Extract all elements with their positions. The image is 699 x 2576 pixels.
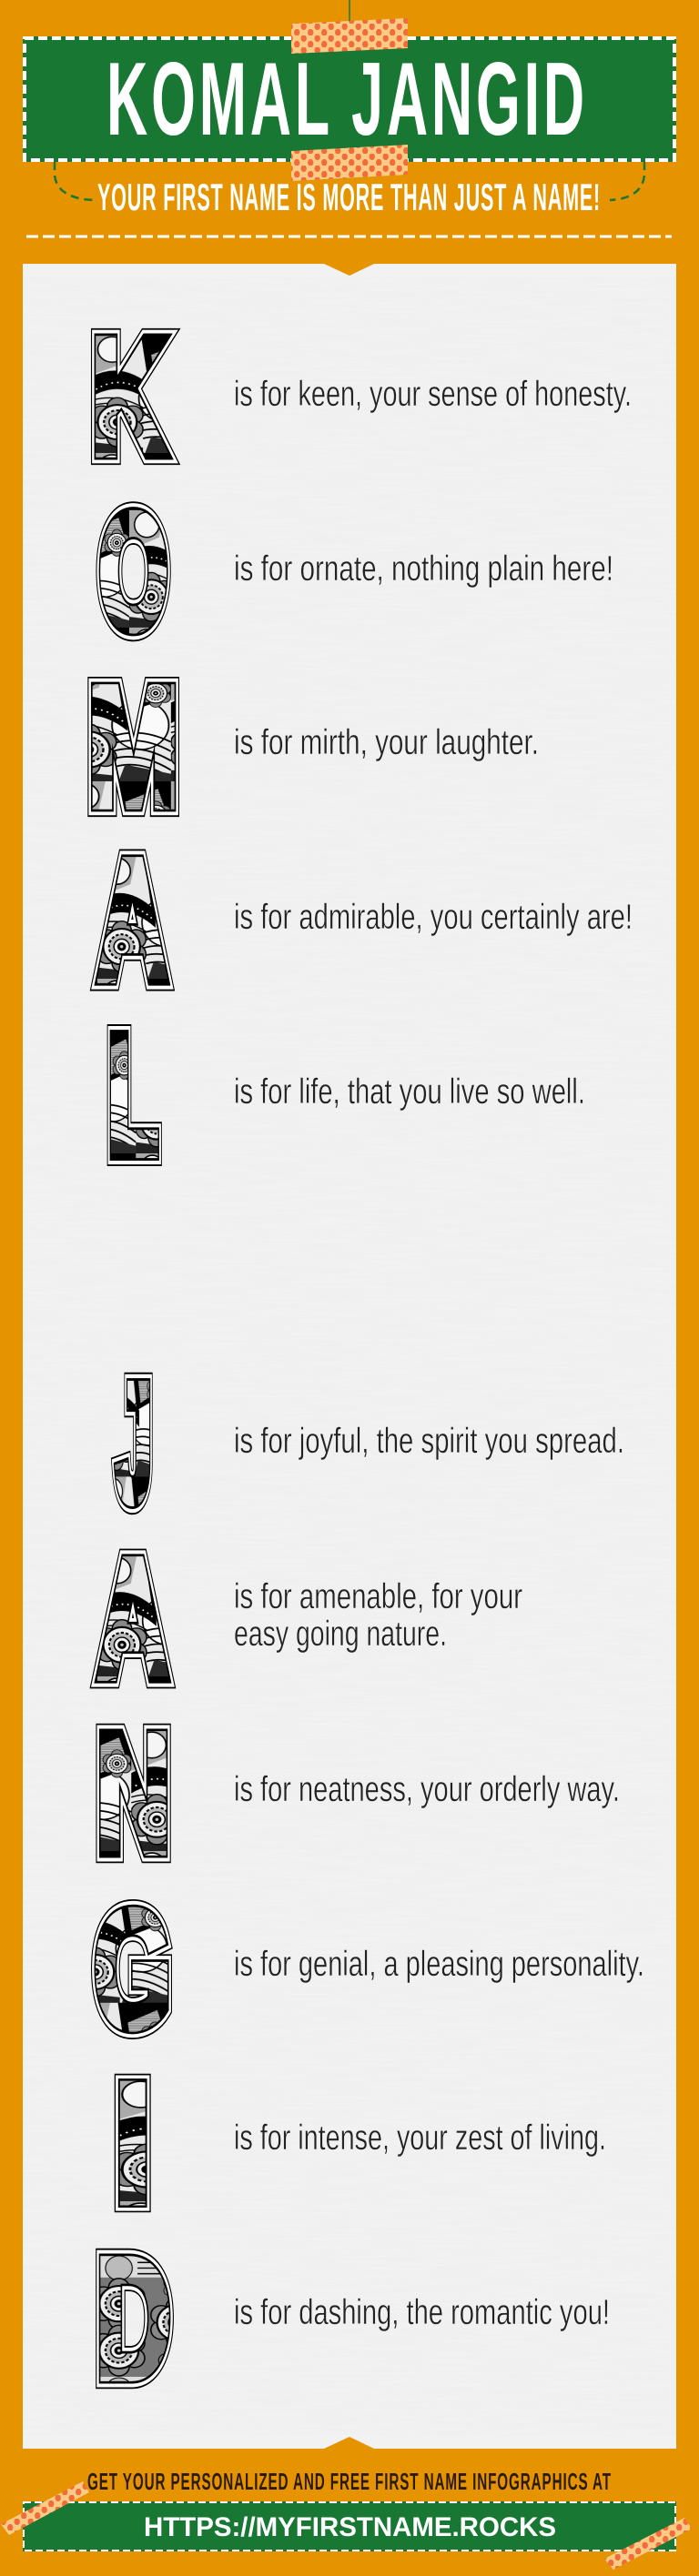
- letter L: L: [107, 1001, 158, 1191]
- letter G: G: [95, 1879, 171, 2061]
- letter M: M: [88, 652, 179, 841]
- letter D: D: [96, 2224, 171, 2413]
- letter J: J: [116, 1352, 152, 1536]
- connector: right: [610, 162, 644, 200]
- connector: left: [55, 162, 94, 200]
- panel: white letters panel: [23, 264, 676, 2449]
- string: [349, 0, 350, 22]
- letter A: A: [97, 826, 167, 1016]
- url: HTTPS://MYFIRSTNAME.ROCKS: [144, 2512, 556, 2542]
- letter I: I: [115, 2049, 151, 2238]
- letter A: A: [97, 1525, 168, 1713]
- letter K: K: [92, 305, 166, 488]
- letter A: A: [97, 1525, 168, 1713]
- letter O: O: [99, 480, 167, 662]
- letter N: N: [96, 1701, 170, 1887]
- letter J: J: [116, 1352, 152, 1536]
- letter K: K: [92, 305, 166, 488]
- letter J: J: [116, 1352, 152, 1536]
- letter K: K: [92, 305, 166, 488]
- letter I: I: [115, 2049, 151, 2238]
- tape: bottom right: [604, 2518, 692, 2570]
- letter O: O: [99, 480, 167, 662]
- letter G: G: [95, 1879, 171, 2061]
- letter A: A: [97, 826, 167, 1016]
- letter L: L: [107, 1001, 158, 1191]
- letter A: A: [97, 826, 167, 1016]
- title banner: [23, 36, 676, 162]
- text: A two lines: [234, 1577, 522, 1654]
- letter N: N: [96, 1701, 170, 1887]
- text: A two lines: is for amenable, for your: [234, 1577, 522, 1616]
- text: L: is for life, that you live so well.: [234, 1072, 585, 1112]
- letter M: M: [88, 652, 179, 841]
- text: A two lines: easy going nature.: [234, 1615, 447, 1654]
- letter O: O: [99, 480, 167, 662]
- letter A: A: [97, 826, 167, 1016]
- tape: bottom left: [1, 2481, 89, 2535]
- letter G: G: [95, 1879, 171, 2061]
- letter I: I: [115, 2049, 151, 2238]
- tape: top: [291, 18, 408, 54]
- letter N: N: [96, 1701, 170, 1887]
- letter L: L: [107, 1001, 158, 1191]
- letter M: M: [88, 652, 179, 841]
- dashed divider: [26, 235, 672, 238]
- text: M: is for mirth, your laughter.: [234, 723, 539, 762]
- letter G: G: [95, 1879, 171, 2061]
- letter D: D: [96, 2224, 171, 2413]
- letter M: M: [88, 652, 179, 841]
- letter K: K: [92, 305, 166, 488]
- letter D: D: [96, 2224, 171, 2413]
- letter L: L: [107, 1001, 158, 1191]
- letter J: J: [116, 1352, 152, 1536]
- letter A: A: [97, 1525, 168, 1713]
- letter N: N: [96, 1701, 170, 1887]
- letter A: A: [97, 1525, 168, 1713]
- footer url banner: [23, 2501, 676, 2551]
- letter D: D: [96, 2224, 171, 2413]
- letter O: O: [99, 480, 167, 662]
- tape: middle: [291, 145, 408, 181]
- letter I: I: [115, 2049, 151, 2238]
- paper texture: [23, 277, 676, 2436]
